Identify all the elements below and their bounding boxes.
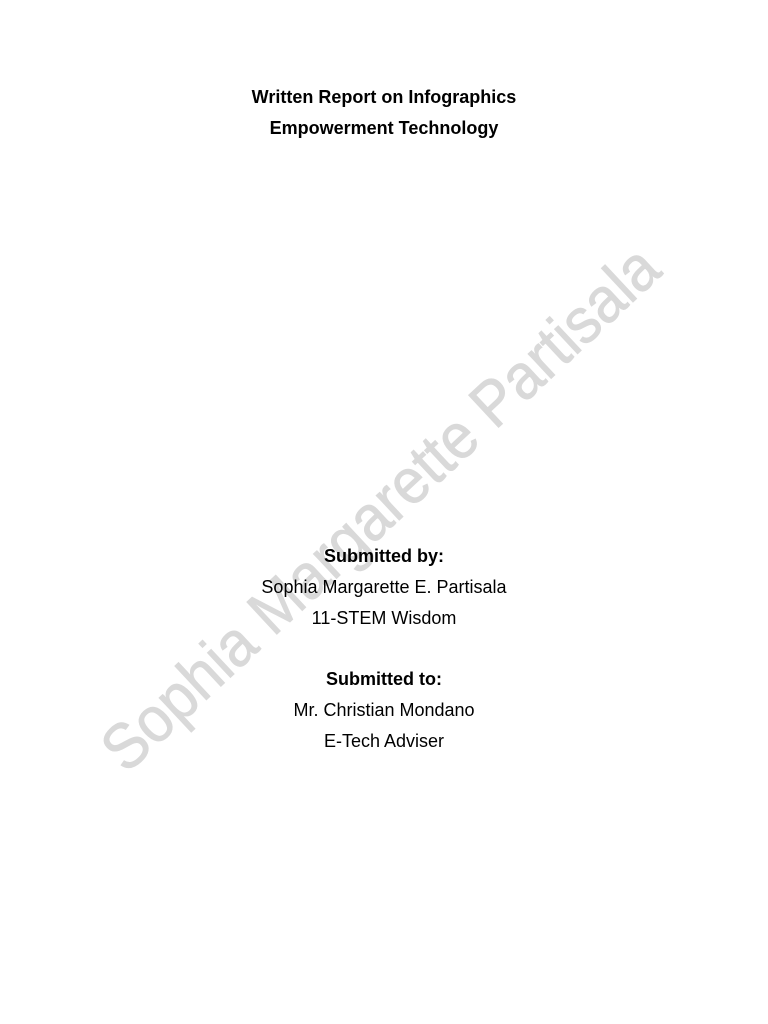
submitted by block	[261, 546, 507, 628]
submitted by heading: Submitted by:	[324, 546, 444, 566]
adviser role: E-Tech Adviser	[324, 731, 444, 751]
subtitle: Empowerment Technology	[270, 118, 498, 138]
adviser name: Mr. Christian Mondano	[293, 700, 475, 720]
submitted to heading: Submitted to:	[326, 669, 442, 689]
title: Written Report on Infographics	[252, 87, 516, 107]
section: 11-STEM Wisdom	[312, 608, 456, 628]
submitted to block	[293, 669, 475, 751]
watermark: Sophia Margarette Partisala	[87, 231, 674, 785]
student name: Sophia Margarette E. Partisala	[261, 577, 507, 597]
